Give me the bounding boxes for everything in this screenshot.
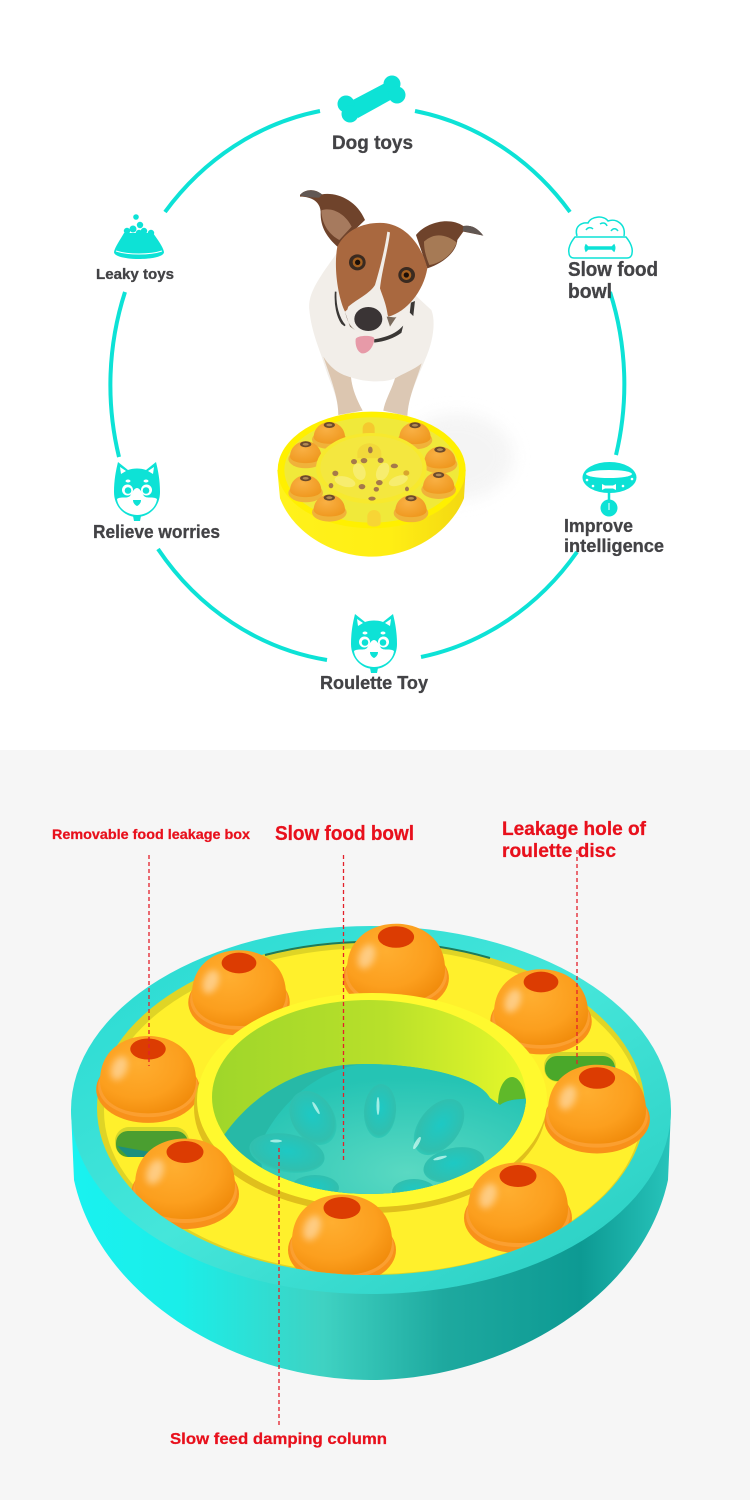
- label: Slow food bowl: [568, 259, 658, 303]
- background: grey lower section: [0, 750, 750, 1500]
- outer body: [71, 1110, 671, 1380]
- icon: slow food bowl outline: [569, 217, 632, 258]
- label: Slow food bowl: bowl: [568, 281, 612, 303]
- label: Roulette Toy: Roulette Toy: [320, 673, 428, 693]
- icon: bone: [338, 76, 406, 122]
- dog with yellow bowl illustration: [277, 190, 513, 557]
- top rim: [71, 926, 671, 1294]
- label: Slow food bowl: Slow food: [568, 259, 658, 281]
- right drain slot: [544, 1052, 616, 1082]
- icon: shiba head (relieve worries): [114, 462, 160, 521]
- label: Dog toys: Dog toys: [332, 133, 413, 154]
- notch in wall: [498, 1077, 526, 1105]
- dog head, ears and face: [300, 190, 483, 353]
- teal floor: [224, 1064, 526, 1194]
- label: Relieve worries: Relieve worries: [93, 522, 220, 542]
- feature ring: circular arcs: [110, 111, 624, 660]
- label: Leaky toys: Leaky toys: [96, 266, 174, 283]
- callout: leakage hole of roulette disc: Leakage hole of: [502, 819, 647, 840]
- icon: collar with pendant: [582, 462, 636, 516]
- background: white upper section: [0, 0, 750, 750]
- back dome feeders: [96, 924, 650, 1153]
- callout: leakage hole of roulette disc: roulette disc: [502, 841, 616, 862]
- petals: [250, 1091, 484, 1193]
- icon: shiba head (roulette toy): [351, 614, 397, 673]
- front dome feeders clipped by rim: [131, 1138, 572, 1285]
- label: Improve intelligence: [564, 516, 664, 556]
- inner wall and yellow floor: [97, 941, 645, 1275]
- bowl shadow: [400, 413, 513, 500]
- yellow bowl body: [277, 412, 466, 557]
- large teal roulette bowl: [71, 924, 671, 1380]
- label: Improve intelligence: Improve: [564, 516, 633, 536]
- small dome feeders: [288, 422, 457, 522]
- callout: leakage hole of roulette disc: [502, 819, 647, 1064]
- dog body: [309, 253, 434, 416]
- icon: kibble bowl: [114, 214, 164, 259]
- centre slow-feed cup: [194, 993, 547, 1213]
- label: Improve intelligence: intelligence: [564, 536, 664, 556]
- left drain slot: [115, 1127, 189, 1157]
- callout: removable food leakage box: Removable food leakage box: [52, 826, 250, 842]
- inner cup with kibble: [316, 433, 427, 504]
- callout: slow food bowl: Slow food bowl: [275, 823, 414, 845]
- callout: slow feed damping column: Slow feed damping column: [170, 1431, 387, 1448]
